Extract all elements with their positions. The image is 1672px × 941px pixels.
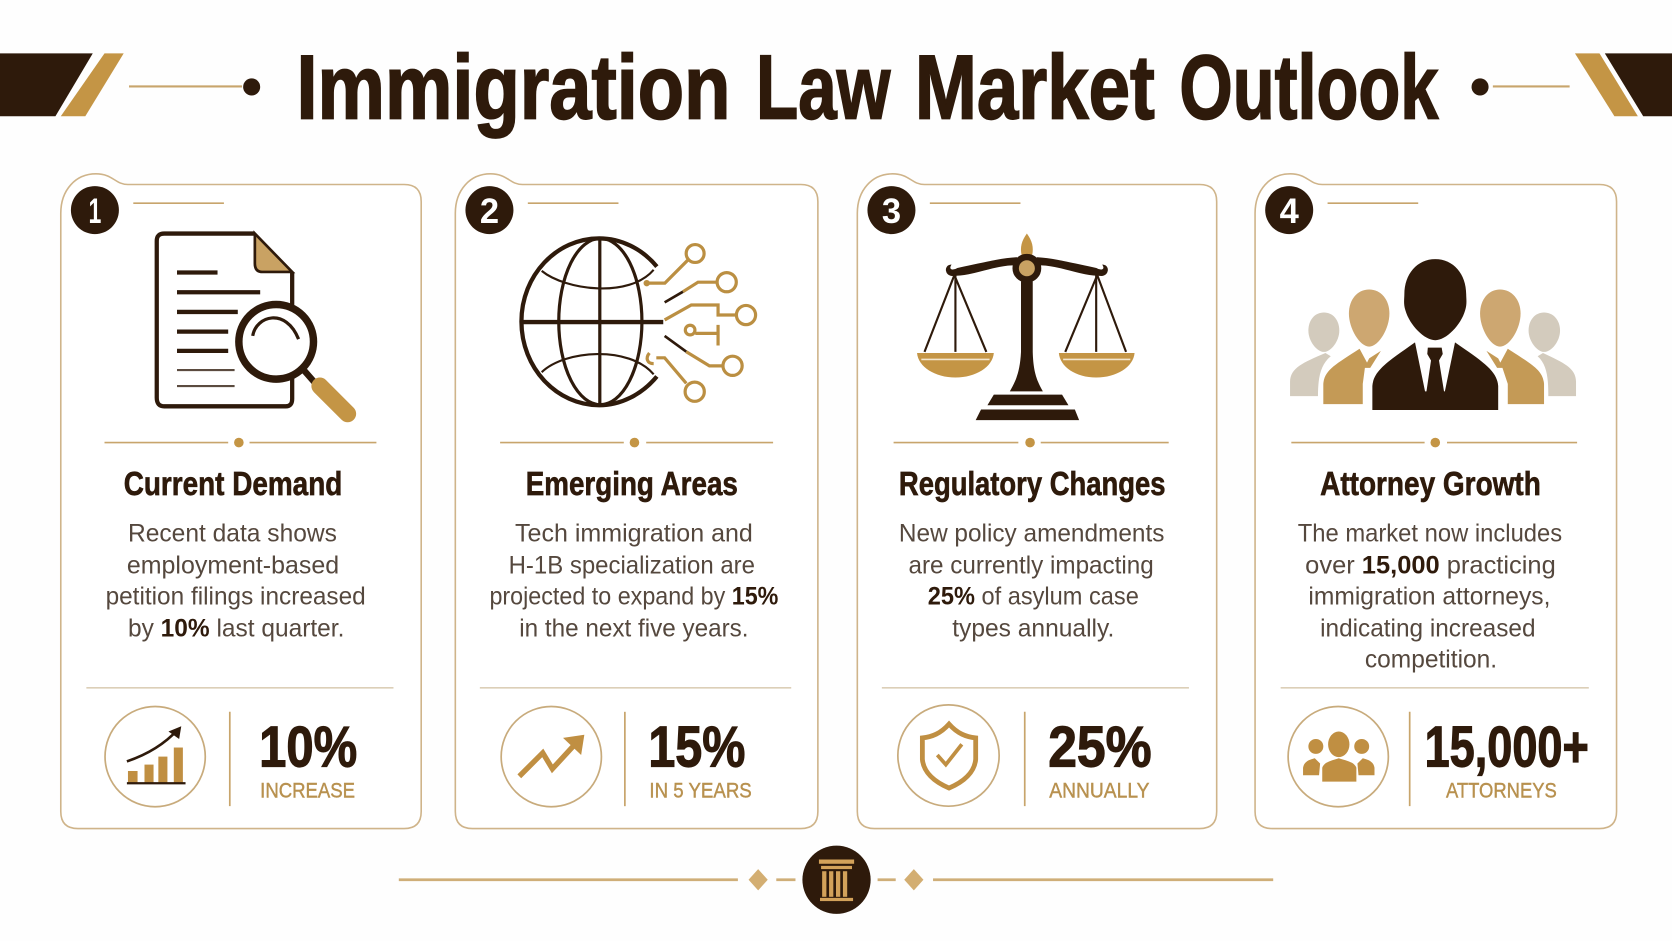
body text: 25% of asylum case (928, 583, 1139, 611)
icon: trend arrow (501, 706, 601, 807)
icon: people group (1288, 706, 1388, 807)
body text: employment-based (127, 552, 339, 580)
divider ornament (104, 438, 376, 447)
body text (899, 520, 1164, 643)
heading: Attorney Growth (1320, 466, 1541, 503)
number badge 3 (867, 186, 915, 234)
number badge 4 (1265, 186, 1313, 234)
number badge 2 (465, 186, 513, 234)
body text: by 10% last quarter. (128, 615, 344, 643)
stat: 10% increase: 10% (259, 716, 357, 780)
icon: group of attorneys (1290, 259, 1576, 410)
divider ornament (500, 438, 773, 447)
stat: 15,000+ attorneys: ATTORNEYS (1446, 779, 1557, 803)
heading: Emerging Areas (526, 466, 738, 503)
number badge 1: 1 (89, 192, 101, 231)
title (296, 37, 1439, 138)
body text: competition. (1365, 646, 1497, 674)
body text: petition filings increased (106, 583, 366, 611)
body text: in the next five years. (519, 615, 749, 643)
stat: 25% annually: 25% (1048, 716, 1152, 780)
title: Market (915, 37, 1155, 138)
number badge 2: 2 (480, 192, 499, 231)
body text: projected to expand by 15% (489, 583, 778, 611)
stat: 15,000+ attorneys (1425, 716, 1589, 803)
body text: over 15,000 practicing (1305, 552, 1556, 580)
panel: emerging areas (455, 174, 818, 829)
title: Law (756, 37, 891, 138)
stat: 25% annually: ANNUALLY (1049, 779, 1150, 803)
header banner left (0, 53, 260, 116)
heading: Current Demand (124, 466, 342, 503)
stat: 15,000+ attorneys: 15,000+ (1425, 716, 1589, 780)
icon: globe with circuit lines (521, 238, 756, 405)
body text: are currently impacting (909, 552, 1154, 580)
body text (106, 520, 366, 643)
divider ornament (1291, 438, 1577, 447)
body text: immigration attorneys, (1308, 583, 1550, 611)
number badge 1 (71, 186, 119, 234)
body text: Tech immigration and (515, 520, 753, 548)
stat: 25% annually (1048, 716, 1152, 803)
stat: 10% increase: INCREASE (260, 779, 355, 803)
divider ornament (894, 438, 1169, 447)
panel: current demand (61, 174, 421, 829)
body text (489, 520, 778, 643)
body text (1298, 520, 1562, 674)
icon: document with magnifier (157, 234, 348, 414)
title: Outlook (1179, 37, 1439, 138)
body text: indicating increased (1320, 615, 1536, 643)
stat: 15% in 5 years: 15% (648, 716, 745, 780)
body text: types annually. (952, 615, 1114, 643)
icon: scales of justice (917, 234, 1135, 420)
panel: regulatory changes (857, 174, 1217, 829)
body text: New policy amendments (899, 520, 1164, 548)
title: Immigration (296, 37, 730, 138)
stat: 15% in 5 years: IN 5 YEARS (649, 779, 752, 803)
number badge 4: 4 (1280, 192, 1299, 231)
stat: 15% in 5 years (648, 716, 752, 803)
body text: Recent data shows (128, 520, 337, 548)
footer ornament with column icon (399, 846, 1273, 914)
stat: 10% increase (259, 716, 357, 803)
icon: bar chart with arrow (105, 706, 205, 807)
icon: shield with check (898, 705, 999, 806)
number badge 3: 3 (882, 192, 901, 231)
panel: attorney growth (1255, 174, 1617, 829)
heading: Regulatory Changes (899, 466, 1165, 503)
body text: The market now includes (1298, 520, 1562, 548)
body text: H-1B specialization are (509, 552, 755, 580)
header banner right (1472, 53, 1672, 116)
